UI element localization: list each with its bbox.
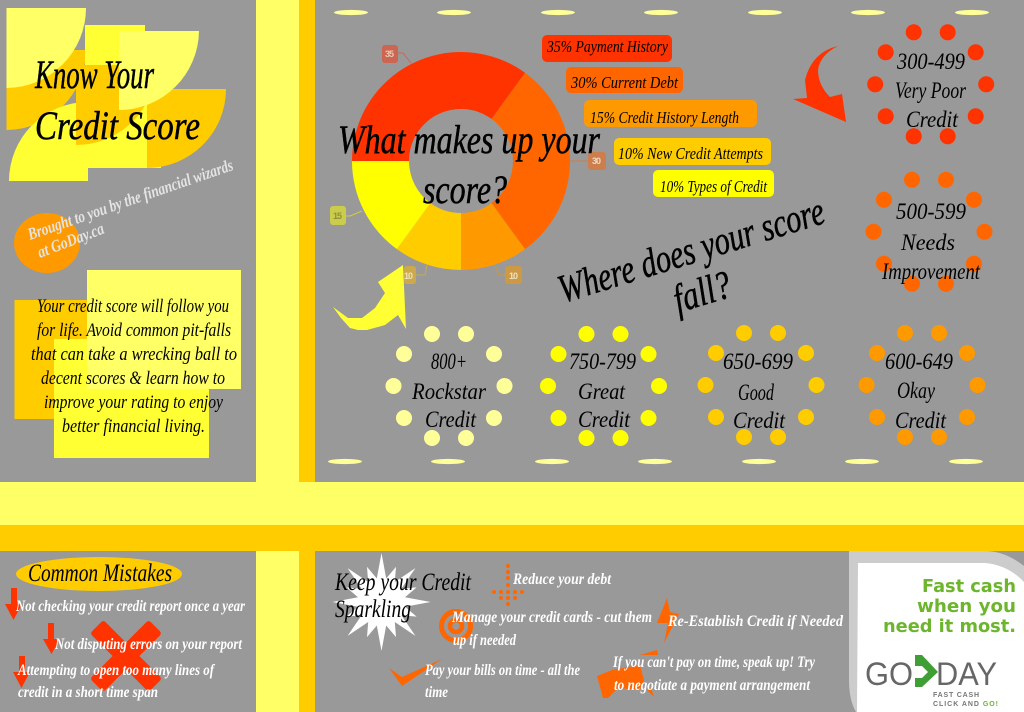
intro text: for life. Avoid common pit-falls (37, 320, 231, 341)
legend pills: 30% Current Debt (570, 73, 679, 92)
heading: keep your credit sparkling: Sparkling (335, 596, 411, 623)
score group: 500-599 needs improvement: Improvement (881, 259, 980, 284)
score group: 600-649 okay credit: Credit (895, 408, 947, 433)
score group: 800+ rockstar credit: Credit (425, 407, 477, 432)
heading: where does your score fall (552, 188, 830, 322)
slogan: when you (917, 596, 1016, 617)
arrow: yellow curved (333, 265, 406, 330)
chart value labels: 10 (404, 271, 413, 281)
score group: 600-649 okay credit: 600-649 (885, 349, 953, 374)
heading: keep your credit sparkling: Keep your Credit (334, 569, 472, 596)
intro panel with overlapping squares (14, 270, 241, 458)
title block with quarter-circle shapes (6, 8, 226, 181)
panel: keep your credit sparkling (332, 553, 844, 701)
intro text: decent scores & learn how to (41, 368, 225, 389)
logo wordmark (865, 655, 998, 708)
score group: 300-499 very poor credit: 300-499 (896, 49, 965, 74)
slogan (883, 576, 1016, 637)
legend pills: 10% Types of Credit (660, 177, 768, 196)
tip: pay your bills on time (424, 662, 580, 701)
score group: 500-599 needs improvement: 500-599 (896, 199, 966, 224)
tip: reduce your debt: Reduce your debt (512, 571, 611, 588)
mistakes list: Not checking your credit report once a year (15, 598, 246, 615)
ad panel: goday logo (849, 551, 1024, 712)
heading: what makes up your score (338, 117, 600, 212)
logo wordmark: CLICK AND GO! (933, 701, 998, 708)
score group: 300-499 very poor credit: Very Poor (895, 78, 967, 103)
intro text (31, 296, 237, 437)
heading: know your credit score: Know Your (34, 52, 154, 97)
heading: common mistakes (16, 557, 182, 591)
score group: 650-699 good credit (698, 325, 824, 445)
mistakes list (15, 598, 246, 701)
heading: where does your score fall: Where does your score (552, 188, 830, 312)
tip: manage your credit cards: up if needed (453, 632, 517, 649)
icon: check mark (389, 659, 442, 686)
score group: 300-499 very poor credit (867, 24, 994, 144)
legend pills: 15% Credit History Length (590, 108, 739, 127)
icon: red x (90, 620, 162, 692)
byline with orange circle (14, 155, 236, 273)
score group: 300-499 very poor credit: Credit (906, 107, 959, 132)
score group: 650-699 good credit: Credit (733, 408, 786, 433)
byline with orange circle: Brought to you by the financial wizards (24, 155, 236, 244)
mistakes list: Attempting to open too many lines of (17, 662, 215, 679)
chart value labels: 15 (333, 211, 342, 221)
logo wordmark: FAST CASH (933, 692, 979, 699)
heading: know your credit score: Credit Score (35, 103, 200, 148)
score group: 650-699 good credit: 650-699 (723, 349, 793, 374)
icon: orange target (442, 612, 470, 640)
heading: what makes up your score: score? (423, 167, 507, 212)
icon: dotted plus arrow (492, 564, 524, 606)
tip: re-establish credit: Re-Establish Credit if Needed (667, 613, 844, 630)
score group: 600-649 okay credit (858, 325, 986, 445)
tip: pay your bills on time: time (425, 684, 448, 701)
chart value labels (330, 45, 606, 284)
icon: lightning bolt (657, 598, 679, 643)
intro text: better financial living. (62, 416, 205, 437)
score group: 800+ rockstar credit (386, 326, 512, 446)
panel: common mistakes (5, 557, 246, 701)
tip: pay your bills on time: Pay your bills on time - all the (424, 662, 580, 679)
tip: speak up if you cannot pay: If you can't pay on time, speak up! Try (612, 654, 816, 671)
heading: keep your credit sparkling (334, 569, 472, 623)
icon: white starburst (332, 553, 430, 651)
decorative ellipses: bottom row (328, 459, 983, 464)
slogan: need it most. (883, 616, 1016, 637)
icons: red down arrows (5, 588, 60, 688)
score group: 750-799 great credit: Credit (578, 407, 631, 432)
score group: 500-599 needs improvement (866, 172, 992, 292)
legend pills: 35% Payment History (546, 37, 668, 56)
heading: know your credit score (34, 52, 200, 148)
legend pills (542, 35, 774, 197)
score group: 800+ rockstar credit: 800+ (431, 349, 467, 374)
tip: manage your credit cards (451, 609, 652, 649)
chart value labels: 35 (385, 49, 394, 59)
logo wordmark: DAY (936, 656, 997, 692)
chart value labels: 10 (509, 271, 518, 281)
intro text: Your credit score will follow you (37, 296, 229, 317)
chart value labels: 30 (592, 156, 601, 166)
score group: 800+ rockstar credit: Rockstar (411, 379, 487, 404)
donut chart: what makes up your score (330, 45, 606, 284)
arrow: red curved (793, 46, 846, 122)
intro text: improve your rating to enjoy (44, 392, 223, 413)
byline with orange circle: at GoDay.ca (35, 219, 107, 262)
heading: common mistakes: Common Mistakes (28, 560, 172, 587)
tip: speak up if you cannot pay (612, 654, 816, 694)
score group: 750-799 great credit (540, 326, 667, 446)
score group: 500-599 needs improvement: Needs (900, 230, 955, 255)
decorative ellipses: top row (334, 10, 989, 15)
mistakes list: Not disputing errors on your report (54, 636, 242, 653)
icon: megaphone (597, 650, 658, 698)
intro text: that can take a wrecking ball to (31, 344, 237, 365)
score group: 600-649 okay credit: Okay (897, 378, 936, 403)
score group: 650-699 good credit: Good (738, 380, 774, 405)
score group: 750-799 great credit: Great (578, 379, 626, 404)
score group: 750-799 great credit: 750-799 (569, 349, 636, 374)
slogan: Fast cash (922, 576, 1016, 597)
heading: what makes up your score: What makes up your (338, 117, 600, 162)
tip: speak up if you cannot pay: to negotiate a payment arrangement (614, 677, 810, 694)
mistakes list: credit in a short time span (18, 684, 158, 701)
heading: where does your score fall: fall? (667, 262, 736, 322)
legend pills: 10% New Credit Attempts (618, 144, 763, 163)
logo wordmark: GO (865, 656, 913, 692)
tip: manage your credit cards: Manage your credit cards - cut them (451, 609, 652, 626)
